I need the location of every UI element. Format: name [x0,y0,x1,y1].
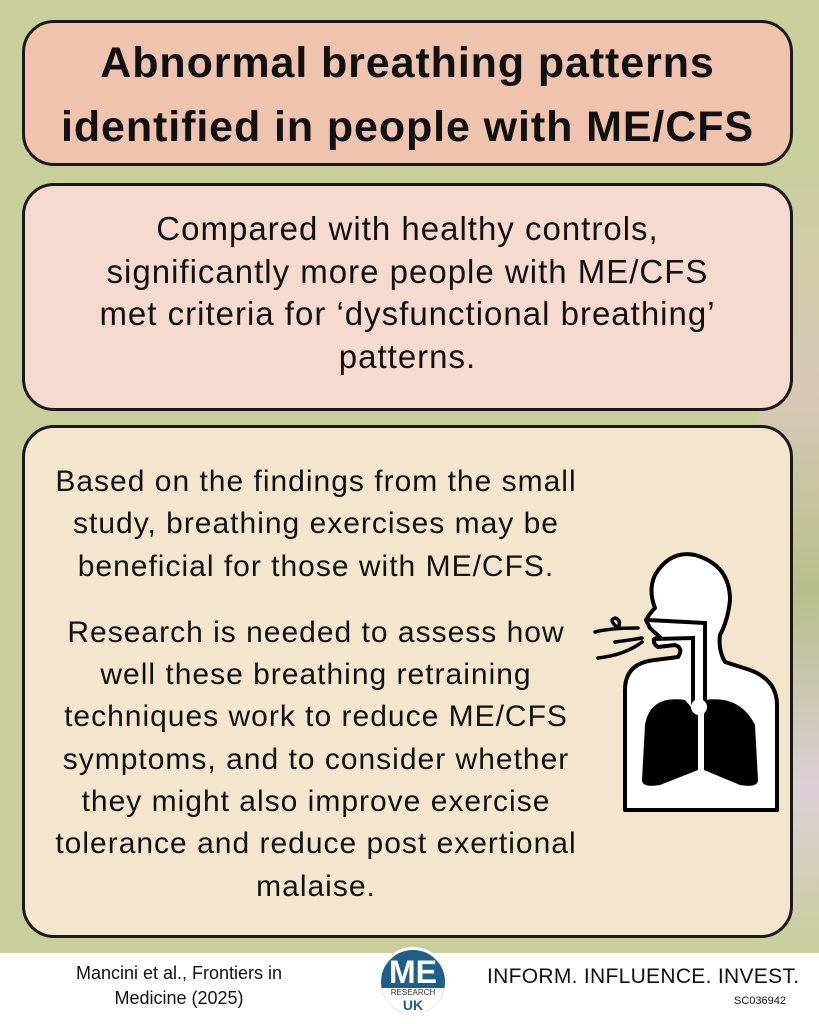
text block: implications [55,465,577,903]
panel: finding: met criteria for ‘dysfunctional breathing’ [99,295,716,332]
panel: finding [22,183,793,411]
text block: implications: Based on the findings from the small [55,465,577,498]
text block: implications: malaise. [256,870,376,903]
icon: breathing person [593,552,779,812]
panel: implications [22,425,793,938]
logo: ME Research UK [378,947,448,1017]
tagline: INFORM. INFLUENCE. INVEST. [487,965,799,988]
text block: implications: beneficial for those with ME/CFS. [78,550,554,583]
background flowers [759,150,819,950]
title [22,20,793,166]
title: Abnormal breathing patterns [100,39,715,87]
text block: implications: well these breathing retraining [100,658,532,691]
citation: Medicine (2025) [114,988,244,1008]
logo: ME Research UK: RESEARCH [391,988,435,997]
text block: implications: tolerance and reduce post exertional [55,827,577,860]
panel: finding: patterns. [339,338,476,374]
logo: ME Research UK: ME [389,954,437,990]
title: identified in people with ME/CFS [61,103,754,151]
text block: implications: Research is needed to assess how [67,616,565,649]
panel: finding: Compared with healthy controls, [156,210,659,247]
footer [0,953,819,1024]
citation: Mancini et al., Frontiers in [76,963,282,983]
charity number: SC036942 [734,995,786,1007]
citation [76,963,282,1008]
text block: implications: techniques work to reduce ME/CFS [64,700,568,733]
text block: implications: symptoms, and to consider whether [63,743,569,776]
logo: ME Research UK: UK [403,997,423,1013]
text block: implications: study, breathing exercises may be [73,507,559,540]
text block: implications: they might also improve exercise [82,785,550,818]
panel: finding: significantly more people with ME/CFS [107,252,708,290]
